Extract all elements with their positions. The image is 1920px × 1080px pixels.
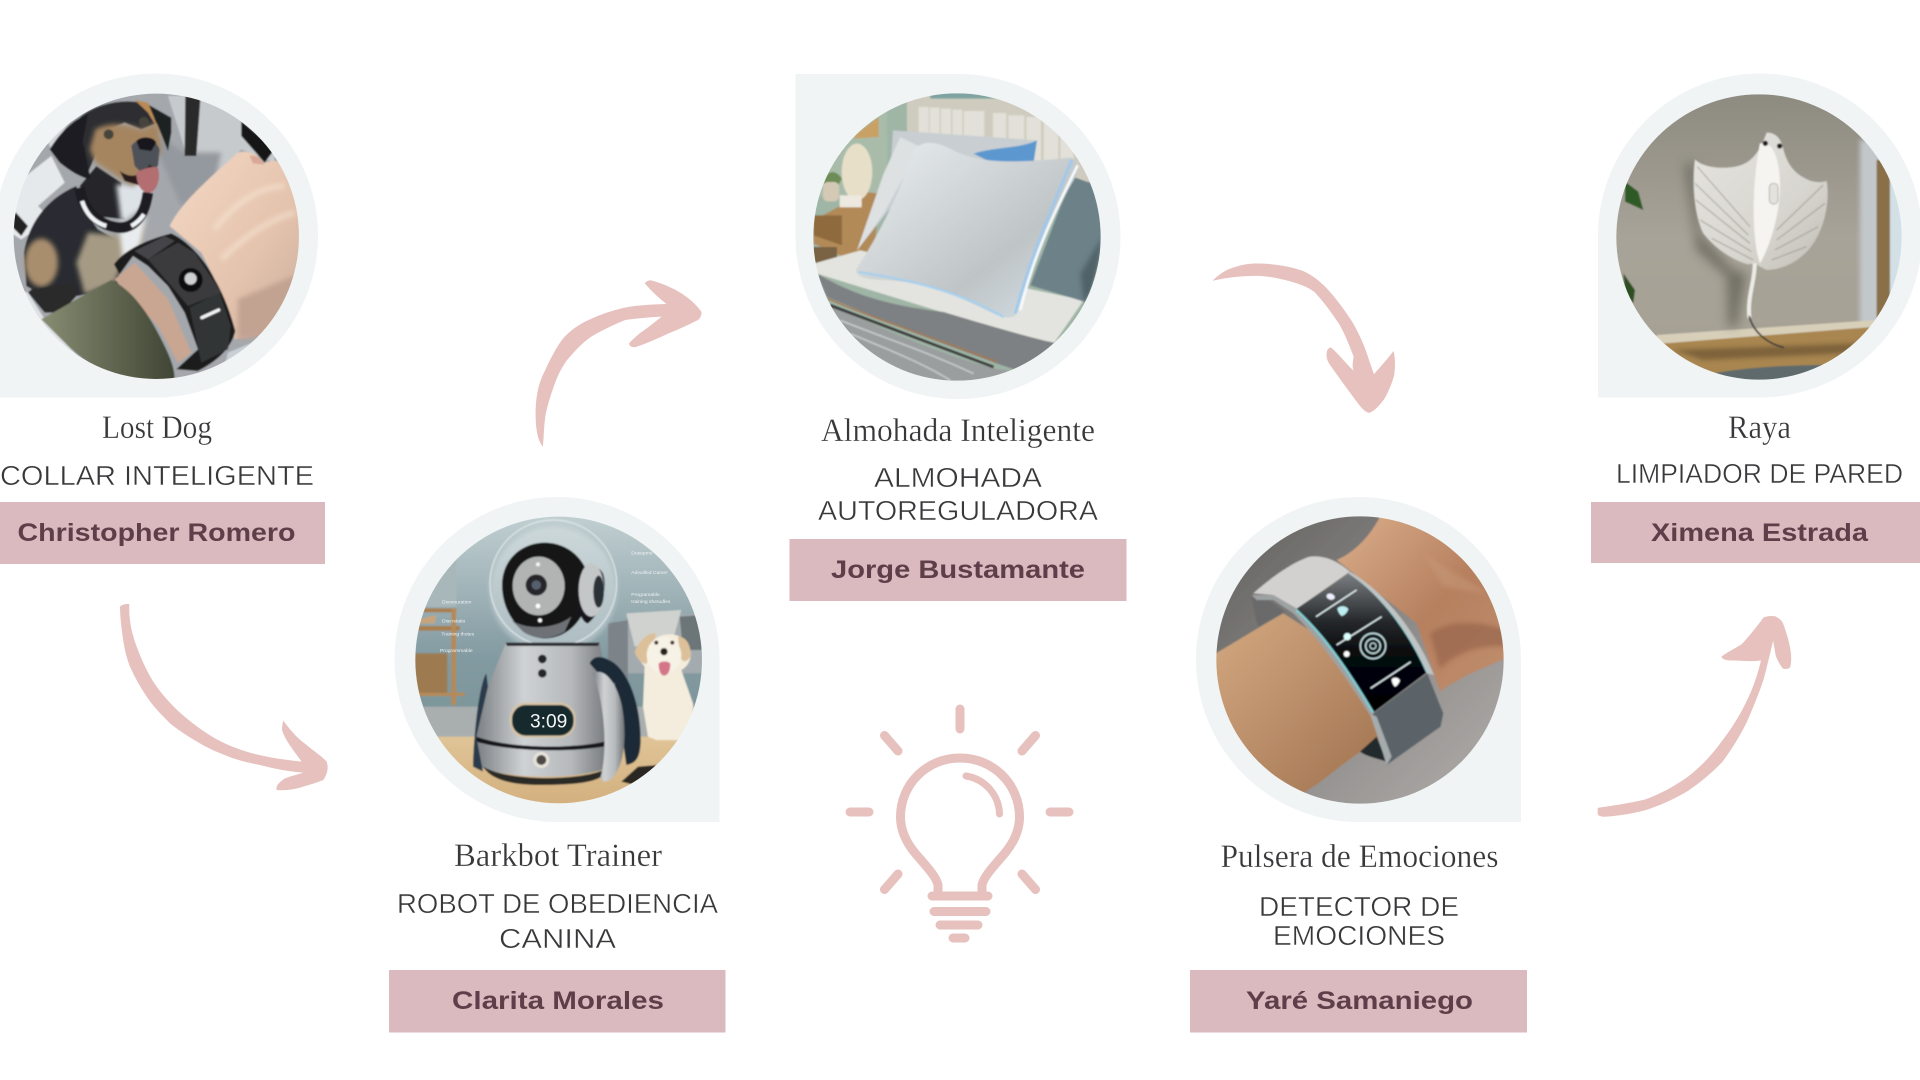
card 3 product type: ALMOHADA (874, 462, 1043, 493)
robot screen labels: Training thotes (441, 632, 475, 638)
card 2 product type (397, 888, 719, 954)
card 4 author name: Yaré Samaniego (1246, 987, 1473, 1015)
image: smart pillow on bed (807, 87, 1107, 387)
image: emotion bracelet on wrist (1210, 510, 1510, 810)
card 1 product name: Lost Dog (102, 410, 212, 446)
robot screen labels: training shetudles (631, 599, 671, 605)
card 1 author bar (0, 502, 325, 564)
arrow: Pulsera to Raya (1598, 616, 1791, 817)
arrow: Lost Dog to Barkbot (120, 604, 328, 790)
card 2 author bar (389, 970, 726, 1032)
card 4 product type: DETECTOR DE (1259, 891, 1459, 922)
card 4 product type (1259, 891, 1459, 951)
image: obedience robot and dog (408, 510, 708, 810)
card 2 background shape (395, 497, 720, 822)
card 5 author name: Ximena Estrada (1651, 519, 1869, 547)
image: stingray wall cleaner (1613, 93, 1907, 383)
robot screen labels: Divomuration (442, 599, 472, 605)
card 1 product type: COLLAR INTELIGENTE (0, 460, 314, 491)
card 3 author bar (790, 539, 1126, 601)
card 2 author name: Clarita Morales (452, 987, 664, 1015)
card 2 product type: ROBOT DE OBEDIENCIA (397, 888, 719, 919)
card 5: Raya (1591, 73, 1920, 563)
card 2: Barkbot Trainer (389, 497, 726, 1033)
card 3 product name: Almohada Inteligente (821, 413, 1095, 449)
card 4: Pulsera de Emociones (1190, 497, 1527, 1033)
icon: lightbulb (850, 709, 1069, 938)
card 1 author name: Christopher Romero (18, 519, 296, 547)
robot screen labels: Programable (631, 592, 660, 598)
robot screen labels: Discrstatio (442, 619, 465, 625)
arrow: Almohada to Pulsera (1213, 264, 1395, 413)
card 4 background shape (1196, 497, 1521, 822)
card 5 author bar (1591, 502, 1920, 563)
robot screen labels: Dusepms (631, 550, 653, 556)
robot screen labels: Programmable (440, 648, 473, 654)
card 3 background shape (796, 74, 1120, 399)
card 1: Lost Dog (0, 73, 325, 564)
card 4 product type: EMOCIONES (1273, 920, 1445, 951)
card 3: Almohada Inteligente (790, 74, 1126, 601)
card 3 product type (818, 462, 1099, 526)
card 5 product type: LIMPIADOR DE PARED (1616, 458, 1903, 489)
card 2 product type: CANINA (499, 923, 617, 954)
robot screen labels: Advuilled Camer (631, 570, 668, 576)
card 5 product name: Raya (1728, 410, 1791, 446)
robot screen labels (440, 550, 671, 654)
robot screen time: 3:09 (530, 711, 567, 732)
card 4 author bar (1190, 970, 1527, 1032)
image: dog and wrist collar (14, 94, 299, 379)
card 5 background shape (1598, 73, 1920, 397)
card 4 product name: Pulsera de Emociones (1220, 839, 1498, 875)
arrow: Barkbot to Almohada (536, 280, 701, 447)
card 3 author name: Jorge Bustamante (831, 556, 1085, 584)
card 3 product type: AUTOREGULADORA (818, 495, 1099, 526)
card 1 background shape (0, 73, 318, 397)
card 2 product name: Barkbot Trainer (454, 838, 662, 874)
